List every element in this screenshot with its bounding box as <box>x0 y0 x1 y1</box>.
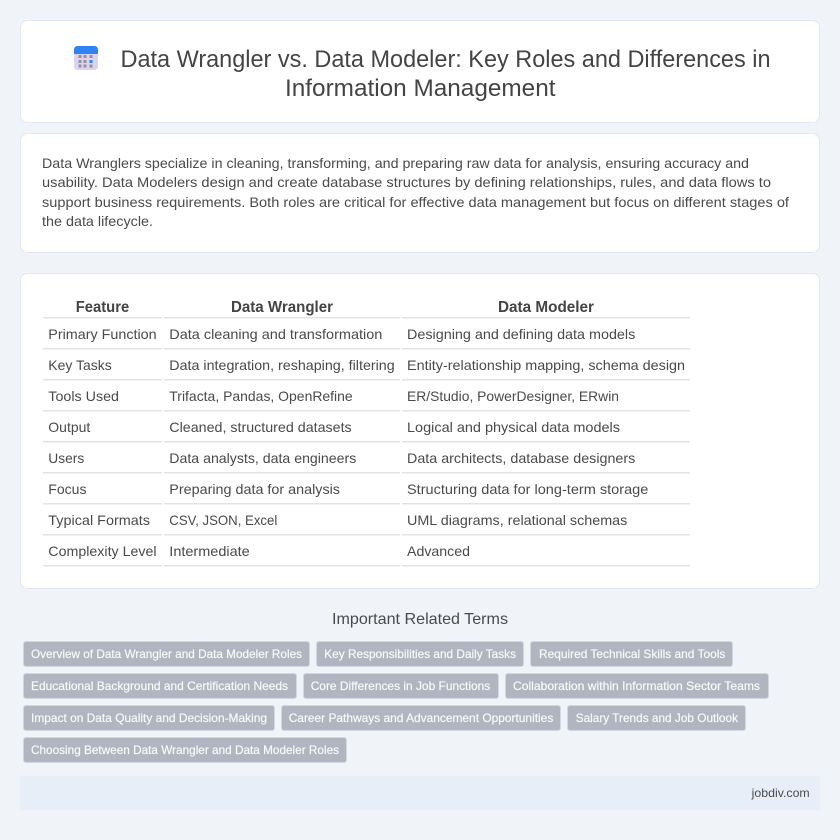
table row: primary function: Designing and defining data models <box>407 326 635 342</box>
table header: Data Wrangler <box>231 299 333 316</box>
table row: tools used <box>43 388 690 412</box>
table row: focus <box>43 481 690 504</box>
tag row 2: Collaboration within Information Sector Teams <box>513 679 760 693</box>
table row: typical formats: Typical Formats <box>48 512 150 528</box>
tag row 3 <box>24 706 746 730</box>
icon: calendar grid <box>74 46 98 70</box>
table row: focus: Preparing data for analysis <box>169 481 340 497</box>
table row: primary function <box>43 326 690 350</box>
tag row 3: Salary Trends and Job Outlook <box>576 711 739 725</box>
tag row 1: Required Technical Skills and Tools <box>539 647 725 661</box>
table row: complexity level: Intermediate <box>169 543 250 559</box>
panel: summary paragraph: usability. Data Modelers design and create database structures by defining relationships, rules, and data flows to <box>42 174 771 190</box>
table row: output: Output <box>48 419 90 435</box>
tag row 2 <box>24 674 768 698</box>
table row: typical formats: UML diagrams, relational schemas <box>407 512 627 528</box>
footer bar <box>20 776 820 810</box>
table row: complexity level: Complexity Level <box>48 543 157 559</box>
table row: primary function: Primary Function <box>48 326 157 342</box>
panel: title card <box>20 20 820 122</box>
table row: focus: Focus <box>48 481 86 497</box>
table row: tools used: ER/Studio, PowerDesigner, ERwin <box>407 388 619 404</box>
tag row 4: Choosing Between Data Wrangler and Data Modeler Roles <box>31 743 339 757</box>
panel: summary paragraph <box>20 134 820 252</box>
title <box>120 46 770 102</box>
table row: output: Logical and physical data models <box>407 419 620 435</box>
panel: related term tags <box>24 642 768 762</box>
tag row 1 <box>24 642 732 666</box>
table row: typical formats <box>43 512 690 536</box>
tag row 2: Core Differences in Job Functions <box>311 679 490 693</box>
panel: summary paragraph: the data lifecycle. <box>42 213 153 229</box>
table row: primary function: Data cleaning and transformation <box>169 326 382 342</box>
table row: tools used: Tools Used <box>48 388 119 404</box>
table row: key tasks: Entity-relationship mapping, schema design <box>407 357 685 373</box>
table row: key tasks: Data integration, reshaping, filtering <box>169 357 395 373</box>
panel: summary paragraph: Data Wranglers specialize in cleaning, transforming, and preparing raw data for analysis, ensuring accuracy and <box>42 155 749 171</box>
table header: Data Modeler <box>498 299 594 316</box>
table row: output: Cleaned, structured datasets <box>169 419 352 435</box>
tag row 1: Key Responsibilities and Daily Tasks <box>324 647 516 661</box>
title: Information Management <box>285 75 556 102</box>
table row: output <box>43 419 690 442</box>
table row: users: Data analysts, data engineers <box>169 450 356 466</box>
table row: tools used: Trifacta, Pandas, OpenRefine <box>169 388 353 404</box>
footer bar: jobdiv.com <box>751 786 810 800</box>
panel: summary paragraph: support business requirements. Both roles are critical for effective data management but focus on different stages of <box>42 194 789 210</box>
tag row 4 <box>24 738 346 762</box>
table row: typical formats: CSV, JSON, Excel <box>169 512 277 528</box>
tag row 3: Impact on Data Quality and Decision-Making <box>31 711 267 725</box>
table row: complexity level <box>43 543 690 566</box>
panel: comparison table card <box>20 274 820 588</box>
table row: complexity level: Advanced <box>407 543 470 559</box>
table row: key tasks: Key Tasks <box>48 357 112 373</box>
heading: important related terms: Important Related Terms <box>332 611 508 628</box>
title: Data Wrangler vs. Data Modeler: Key Roles and Differences in <box>120 46 770 73</box>
tag row 2: Educational Background and Certification Needs <box>31 679 288 693</box>
tag row 1: Overview of Data Wrangler and Data Modeler Roles <box>31 647 302 661</box>
table row: users <box>43 450 690 474</box>
table header <box>43 299 690 318</box>
table row: users: Data architects, database designers <box>407 450 635 466</box>
table row: focus: Structuring data for long-term storage <box>407 481 649 497</box>
table header: Feature <box>76 299 129 316</box>
tag row 3: Career Pathways and Advancement Opportunities <box>289 711 553 725</box>
table row: key tasks <box>43 357 690 380</box>
table row: users: Users <box>48 450 84 466</box>
